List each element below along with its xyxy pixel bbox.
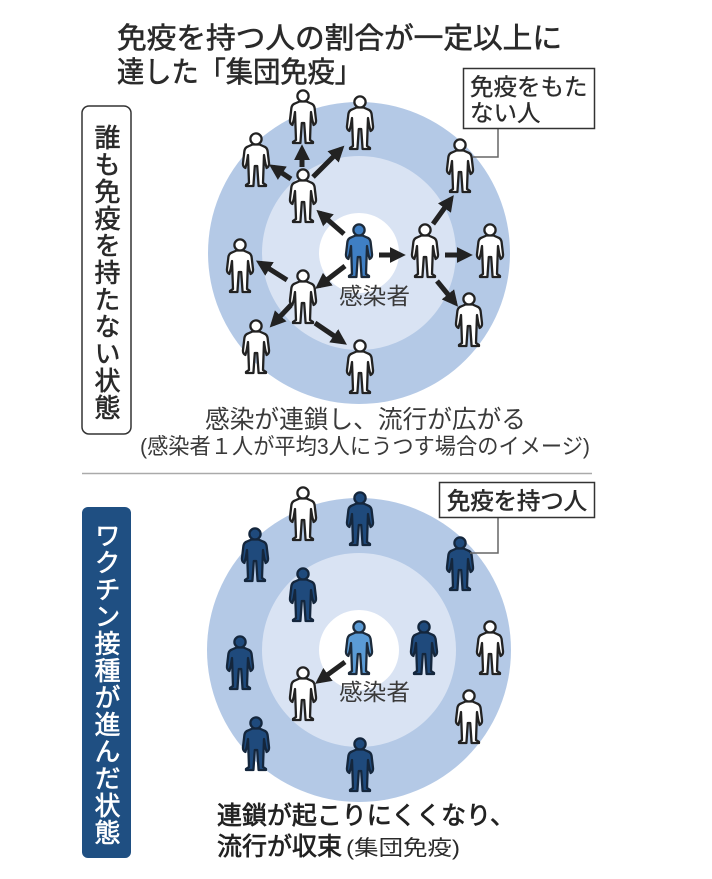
panel label: no immunity state [82, 106, 131, 434]
caption: herd immunity outcome: 流行が収束 [217, 833, 342, 861]
panel label: no immunity state: 誰も免疫を持たない状態 [91, 124, 121, 421]
title: 達した「集団免疫」 [117, 56, 362, 89]
panel label: vaccination progressed: ワクチン接種が進んだ状態 [91, 522, 121, 846]
label: infected person: 感染者 [339, 283, 410, 309]
label: infected person bottom: 感染者 [339, 679, 410, 705]
title: 免疫を持つ人の割合が一定以上に [117, 22, 562, 55]
infection arrows: top diagram [260, 149, 468, 342]
concentric circles: bottom diagram [207, 498, 511, 802]
caption: chain of infection: 感染が連鎖し、流行が広がる [205, 406, 526, 434]
callout: people with immunity: 免疫を持つ人 [447, 488, 587, 514]
people with immunity: bottom diagram [227, 492, 473, 791]
caption: herd immunity outcome [217, 802, 515, 861]
divider [82, 472, 592, 474]
callout: people with immunity [440, 482, 594, 553]
infected person: bottom diagram [346, 621, 372, 674]
people without immunity: top diagram [227, 90, 503, 393]
infected person: top diagram [346, 224, 372, 277]
callout: people without immunity: ない人 [470, 100, 540, 126]
caption: chain of infection [140, 406, 590, 459]
people without immunity: bottom diagram [290, 487, 503, 743]
caption: chain of infection: (感染者１人が平均3人にうつす場合のイメージ) [140, 434, 590, 459]
panel label: vaccination progressed [82, 507, 131, 858]
caption: herd immunity outcome: 連鎖が起こりにくくなり、 [217, 802, 515, 830]
callout: people without immunity [464, 68, 594, 157]
title [117, 22, 562, 89]
concentric circles: top diagram [208, 102, 510, 404]
caption: herd immunity outcome: (集団免疫) [346, 837, 460, 860]
callout: people without immunity: 免疫をもた [470, 74, 588, 100]
infection arrow: bottom diagram [319, 662, 345, 681]
